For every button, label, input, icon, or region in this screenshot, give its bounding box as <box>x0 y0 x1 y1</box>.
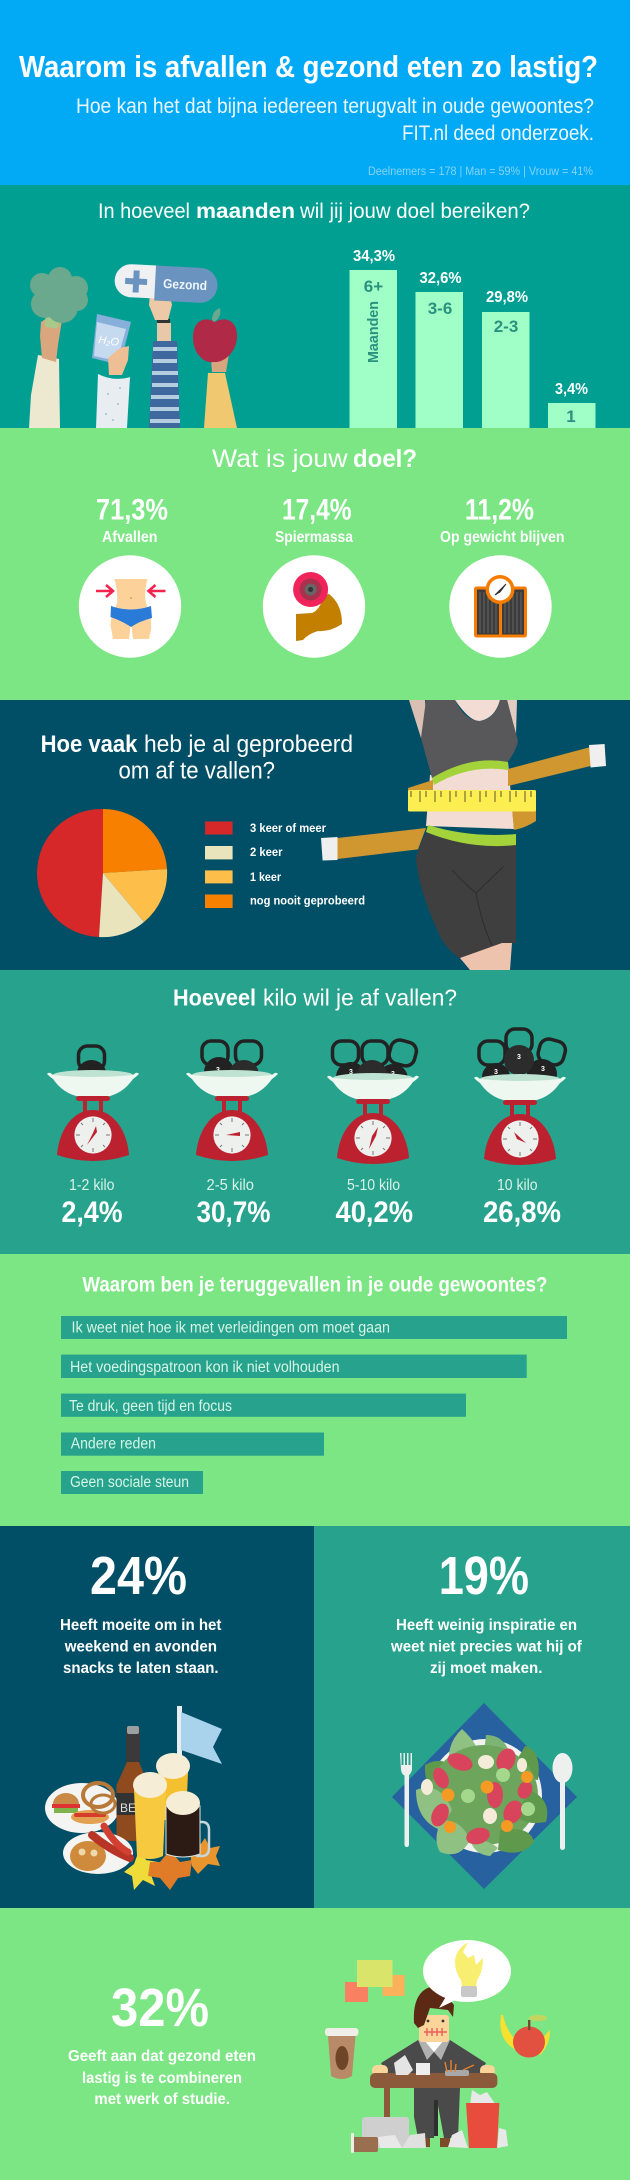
laptop and cup on floor <box>351 2117 426 2153</box>
scale: 10 kilo: 10 kilo <box>497 1177 538 1194</box>
illustration: salad plate <box>392 1703 577 1889</box>
bar chart: months: 2-3 <box>494 317 518 336</box>
panel: 19 percent <box>314 1526 630 1908</box>
fruit <box>500 2015 550 2058</box>
bar chart: reasons: Het voedingspatroon kon ik niet volhouden <box>70 1359 340 1376</box>
strawberries and vegetables <box>421 1745 535 1847</box>
text: werk of studie: Geeft aan dat gezond eten <box>68 2048 256 2065</box>
heading: hoe vaak: heb je al geprobeerd <box>144 731 353 758</box>
subtitle: FIT.nl deed onderzoek. <box>402 122 594 145</box>
illustration: snacks and beer <box>45 1706 222 1890</box>
text: snacks: snacks te laten staan. <box>63 1660 219 1677</box>
tape left end <box>338 828 426 859</box>
heading: hoeveel kilo: kilo wil je af vallen? <box>263 985 457 1011</box>
heading: hoe vaak <box>41 731 353 784</box>
stat: spiermassa: Spiermassa <box>275 529 353 546</box>
heading: doel: doel? <box>353 445 417 473</box>
panel: 32 percent <box>0 1908 630 2180</box>
wastebasket and papers <box>448 2090 508 2148</box>
scale: 2-5 kilo: 3 <box>216 1067 220 1074</box>
legend <box>205 822 365 908</box>
scale: 1-2 kilo <box>47 1046 139 1229</box>
illustration: stressed office worker <box>325 1940 550 2153</box>
water glass hand: H₂O <box>98 334 120 349</box>
legend: 2 keer <box>250 847 283 859</box>
spoon <box>552 1753 572 1850</box>
bar chart: months: 6+ <box>364 277 383 296</box>
heading: hoe vaak: Hoe vaak <box>41 731 138 758</box>
bar chart: months: 29,8% <box>486 289 528 306</box>
panel: 24 percent <box>0 1526 314 1908</box>
panel: teruggevallen <box>0 1254 630 1526</box>
pill hand <box>114 263 218 428</box>
shorts <box>416 829 516 959</box>
napkin <box>392 1703 577 1889</box>
beer bottle <box>116 1726 149 1841</box>
bar chart: reasons: Geen sociale steun <box>70 1474 189 1491</box>
plate <box>428 1739 542 1853</box>
heading: teruggevallen: Waarom ben je teruggevallen in je oude gewoontes? <box>82 1273 547 1296</box>
yellow tape <box>408 790 536 812</box>
text: werk of studie: met werk of studie. <box>94 2091 230 2108</box>
water glass hand <box>92 314 131 428</box>
bar chart: reasons: Ik weet niet hoe ik met verleidingen om moet gaan <box>72 1320 390 1336</box>
pie chart <box>37 809 167 937</box>
scale: 10 kilo: 3 <box>517 1054 521 1061</box>
thought bubble with broken bulb <box>423 1940 511 2008</box>
stat: afvallen: 71,3% <box>96 494 168 526</box>
flag <box>177 1706 222 1764</box>
panel: doel <box>0 428 630 700</box>
bar chart: reasons: Andere reden <box>71 1436 156 1453</box>
apple hand <box>193 308 237 428</box>
heading: doel: Wat is jouw <box>212 445 348 473</box>
salad leaves <box>416 1729 547 1856</box>
scale: 10 kilo: 26,8% <box>483 1196 561 1229</box>
scale: 5-10 kilo: 3 <box>349 1069 353 1076</box>
pill label: Gezond <box>163 276 207 293</box>
legend: nog nooit geprobeerd <box>250 896 365 908</box>
text: inspiratie <box>390 1617 582 1677</box>
stat: afvallen <box>79 494 181 658</box>
text: inspiratie: zij moet maken. <box>430 1660 542 1677</box>
legend: 1 keer <box>250 872 281 884</box>
subtitle: Hoe kan het dat bijna iedereen terugvalt in oude gewoontes? <box>76 95 594 118</box>
bar chart: reasons: Te druk, geen tijd en focus <box>69 1398 232 1415</box>
heading: maanden: wil jij jouw doel bereiken? <box>299 200 530 223</box>
heading: doel <box>212 445 417 473</box>
illustration: raised hands with healthy items <box>29 263 237 428</box>
beer glasses <box>133 1753 209 1859</box>
sticky notes <box>345 1960 404 2002</box>
stat: op gewicht blijven <box>440 494 564 658</box>
scale: 1-2 kilo: 2,4% <box>62 1196 122 1229</box>
heading: maanden: maanden <box>196 200 295 223</box>
bar chart: months <box>350 248 596 428</box>
scale: 5-10 kilo: 3 <box>391 1071 395 1078</box>
text: werk of studie: lastig is te combineren <box>82 2070 242 2087</box>
scale: 10 kilo: 3 <box>494 1069 498 1076</box>
plate with burger <box>45 1783 119 1833</box>
bar chart: months: 3,4% <box>555 381 588 398</box>
heading: hoe vaak: om af te vallen? <box>118 758 275 784</box>
scale: 2-5 kilo: 2-5 kilo <box>206 1177 254 1194</box>
scale: 5-10 kilo: 40,2% <box>336 1196 413 1229</box>
text: snacks: weekend en avonden <box>64 1639 217 1656</box>
desk <box>370 2055 497 2120</box>
bar chart: months: 34,3% <box>353 248 395 265</box>
participants note: Deelnemers = 178 | Man = 59% | Vrouw = 41% <box>368 166 593 178</box>
heading: hoeveel kilo <box>173 985 457 1011</box>
stat: op gewicht blijven: 11,2% <box>465 494 534 526</box>
bar chart: months: Maanden <box>365 301 382 363</box>
stat: spiermassa: 17,4% <box>282 494 352 526</box>
fork <box>400 1753 412 1847</box>
heading: hoeveel kilo: Hoeveel <box>173 985 256 1011</box>
heading: maanden: In hoeveel <box>98 200 190 223</box>
stat: op gewicht blijven: Op gewicht blijven <box>440 529 564 546</box>
broccoli hand <box>29 267 88 428</box>
bar chart: reasons <box>61 1316 567 1494</box>
scale: 2-5 kilo: 30,7% <box>196 1196 270 1229</box>
icon: bathroom scale <box>476 575 526 636</box>
plate with pretzel <box>63 1826 133 1874</box>
heading: maanden <box>98 200 530 223</box>
stat: spiermassa <box>263 494 365 658</box>
beer bottle: BEE <box>120 1801 144 1815</box>
illustration: woman with measuring tape <box>321 700 606 970</box>
panel: maanden <box>0 185 630 428</box>
scale: 10 kilo <box>474 1029 567 1229</box>
stat: afvallen: Afvallen <box>102 529 158 546</box>
scale: 10 kilo: 3 <box>541 1066 545 1073</box>
scale: 2-5 kilo <box>186 1041 278 1229</box>
panel: hoe vaak <box>0 700 630 970</box>
panel: header <box>0 0 630 185</box>
scale: 1-2 kilo: 1-2 kilo <box>69 1177 115 1194</box>
bar chart: months: 1 <box>566 407 576 426</box>
legend: 3 keer of meer <box>250 823 327 835</box>
stat: 19%: 19% <box>439 1546 529 1606</box>
scale: 5-10 kilo <box>327 1038 419 1229</box>
scale: 5-10 kilo: 5-10 kilo <box>347 1177 400 1194</box>
text: inspiratie: Heeft weinig inspiratie en <box>396 1617 577 1634</box>
bar chart: months: 3-6 <box>428 299 452 318</box>
stat: 32%: 32% <box>111 1978 209 2038</box>
leaves <box>124 1838 220 1890</box>
worker <box>372 1986 495 2147</box>
icon: waist <box>96 579 166 639</box>
icon: muscle with dumbbell <box>293 572 342 641</box>
tape right end <box>508 747 591 786</box>
subtitle <box>76 95 594 145</box>
panel: hoeveel kilo <box>0 970 630 1254</box>
stat: 24%: 24% <box>90 1546 187 1606</box>
text: snacks <box>60 1617 222 1677</box>
text: werk of studie <box>68 2048 256 2108</box>
coffee cup <box>325 2028 358 2079</box>
text: inspiratie: weet niet precies wat hij of <box>390 1639 582 1656</box>
text: snacks: Heeft moeite om in het <box>60 1617 222 1634</box>
bar chart: months: 32,6% <box>420 270 462 287</box>
